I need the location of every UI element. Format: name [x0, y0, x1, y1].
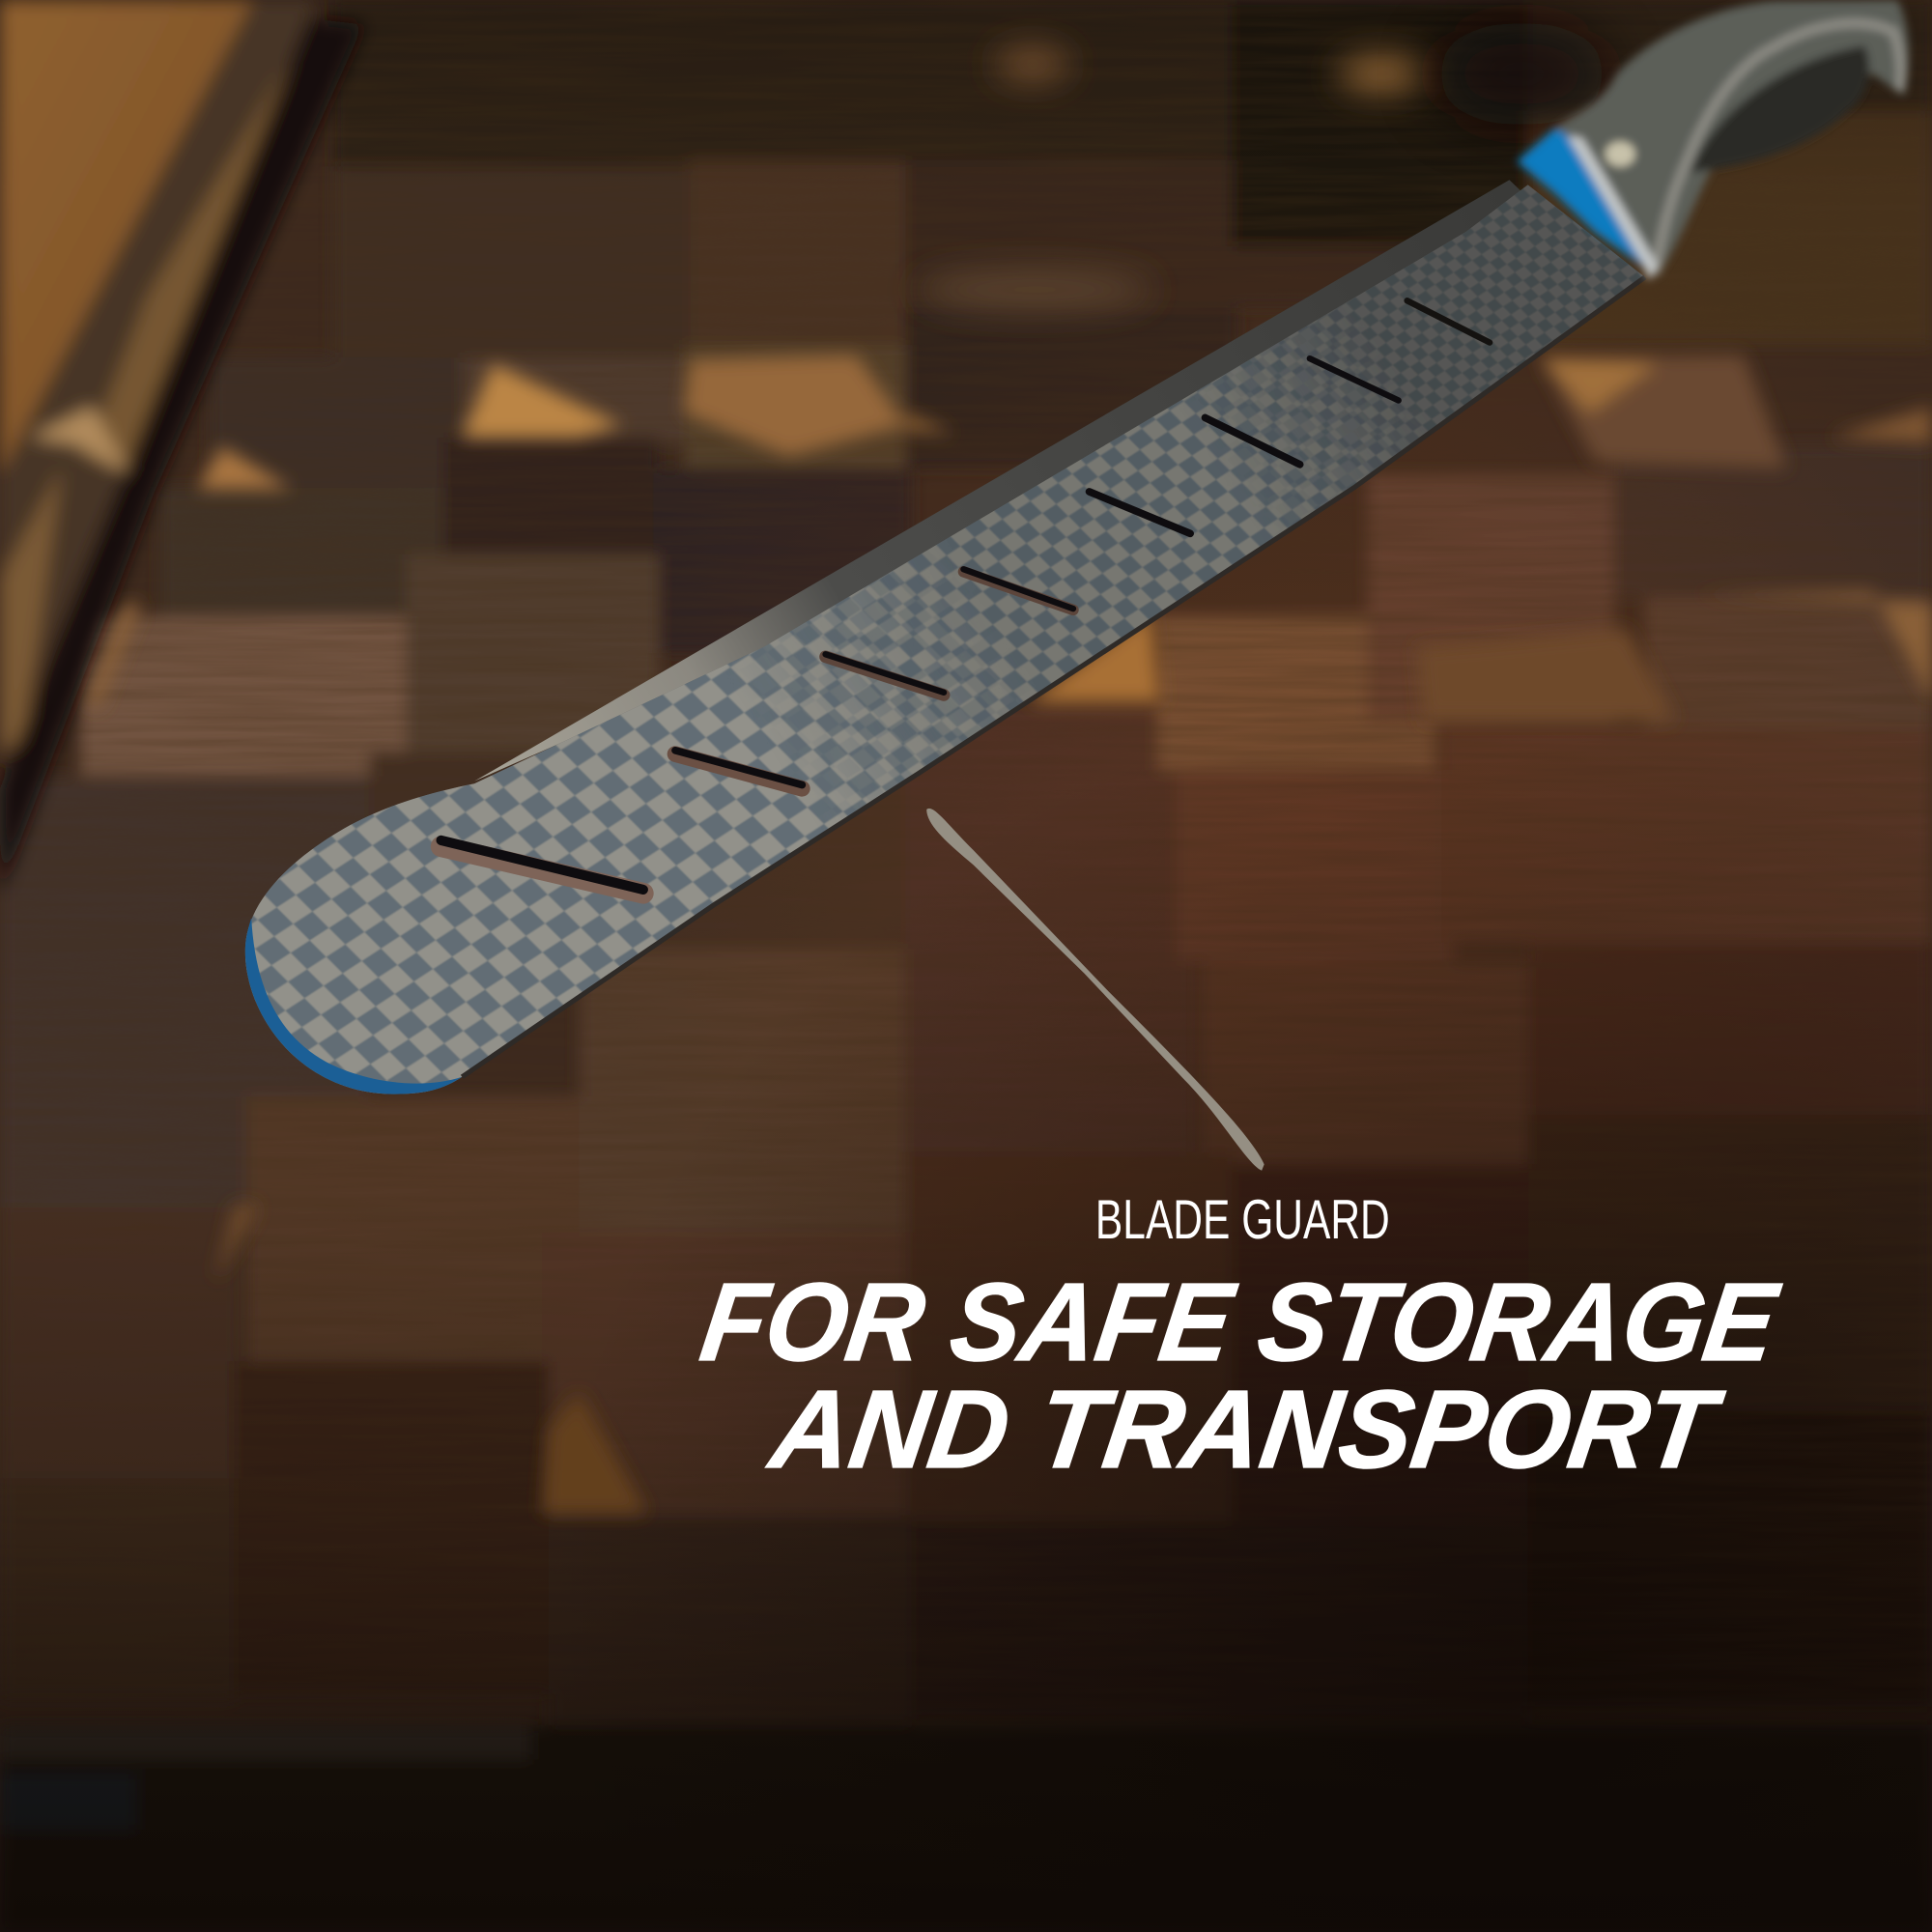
callout line	[926, 809, 1264, 1171]
handle inset grip	[1690, 45, 1869, 173]
dark shadow behind handle	[1435, 22, 1608, 126]
knife handle	[1517, 0, 1909, 281]
carbon-fiber texture	[245, 185, 1642, 1094]
label: blade guard: BLADE GUARD	[1095, 1189, 1390, 1251]
headline line 1: FOR SAFE STORAGE	[694, 1262, 1786, 1384]
blue guard rim	[245, 918, 462, 1094]
guard body	[245, 185, 1645, 1094]
blue collar	[1517, 128, 1645, 268]
headline line 2: AND TRANSPORT	[761, 1369, 1730, 1492]
white collar stripe	[1567, 135, 1658, 281]
logo	[1605, 142, 1635, 166]
blade guard	[245, 185, 1646, 1094]
handle highlight ridge	[1655, 23, 1901, 273]
slots	[441, 300, 1490, 894]
board corner and left rail	[0, 0, 363, 894]
knife blade	[474, 180, 1540, 781]
handle body	[1555, 0, 1909, 276]
guard lower edge	[462, 277, 1645, 1077]
soft distant highlights	[918, 48, 1427, 309]
warm wood highlights	[86, 355, 1932, 1513]
headline	[694, 1262, 1786, 1492]
